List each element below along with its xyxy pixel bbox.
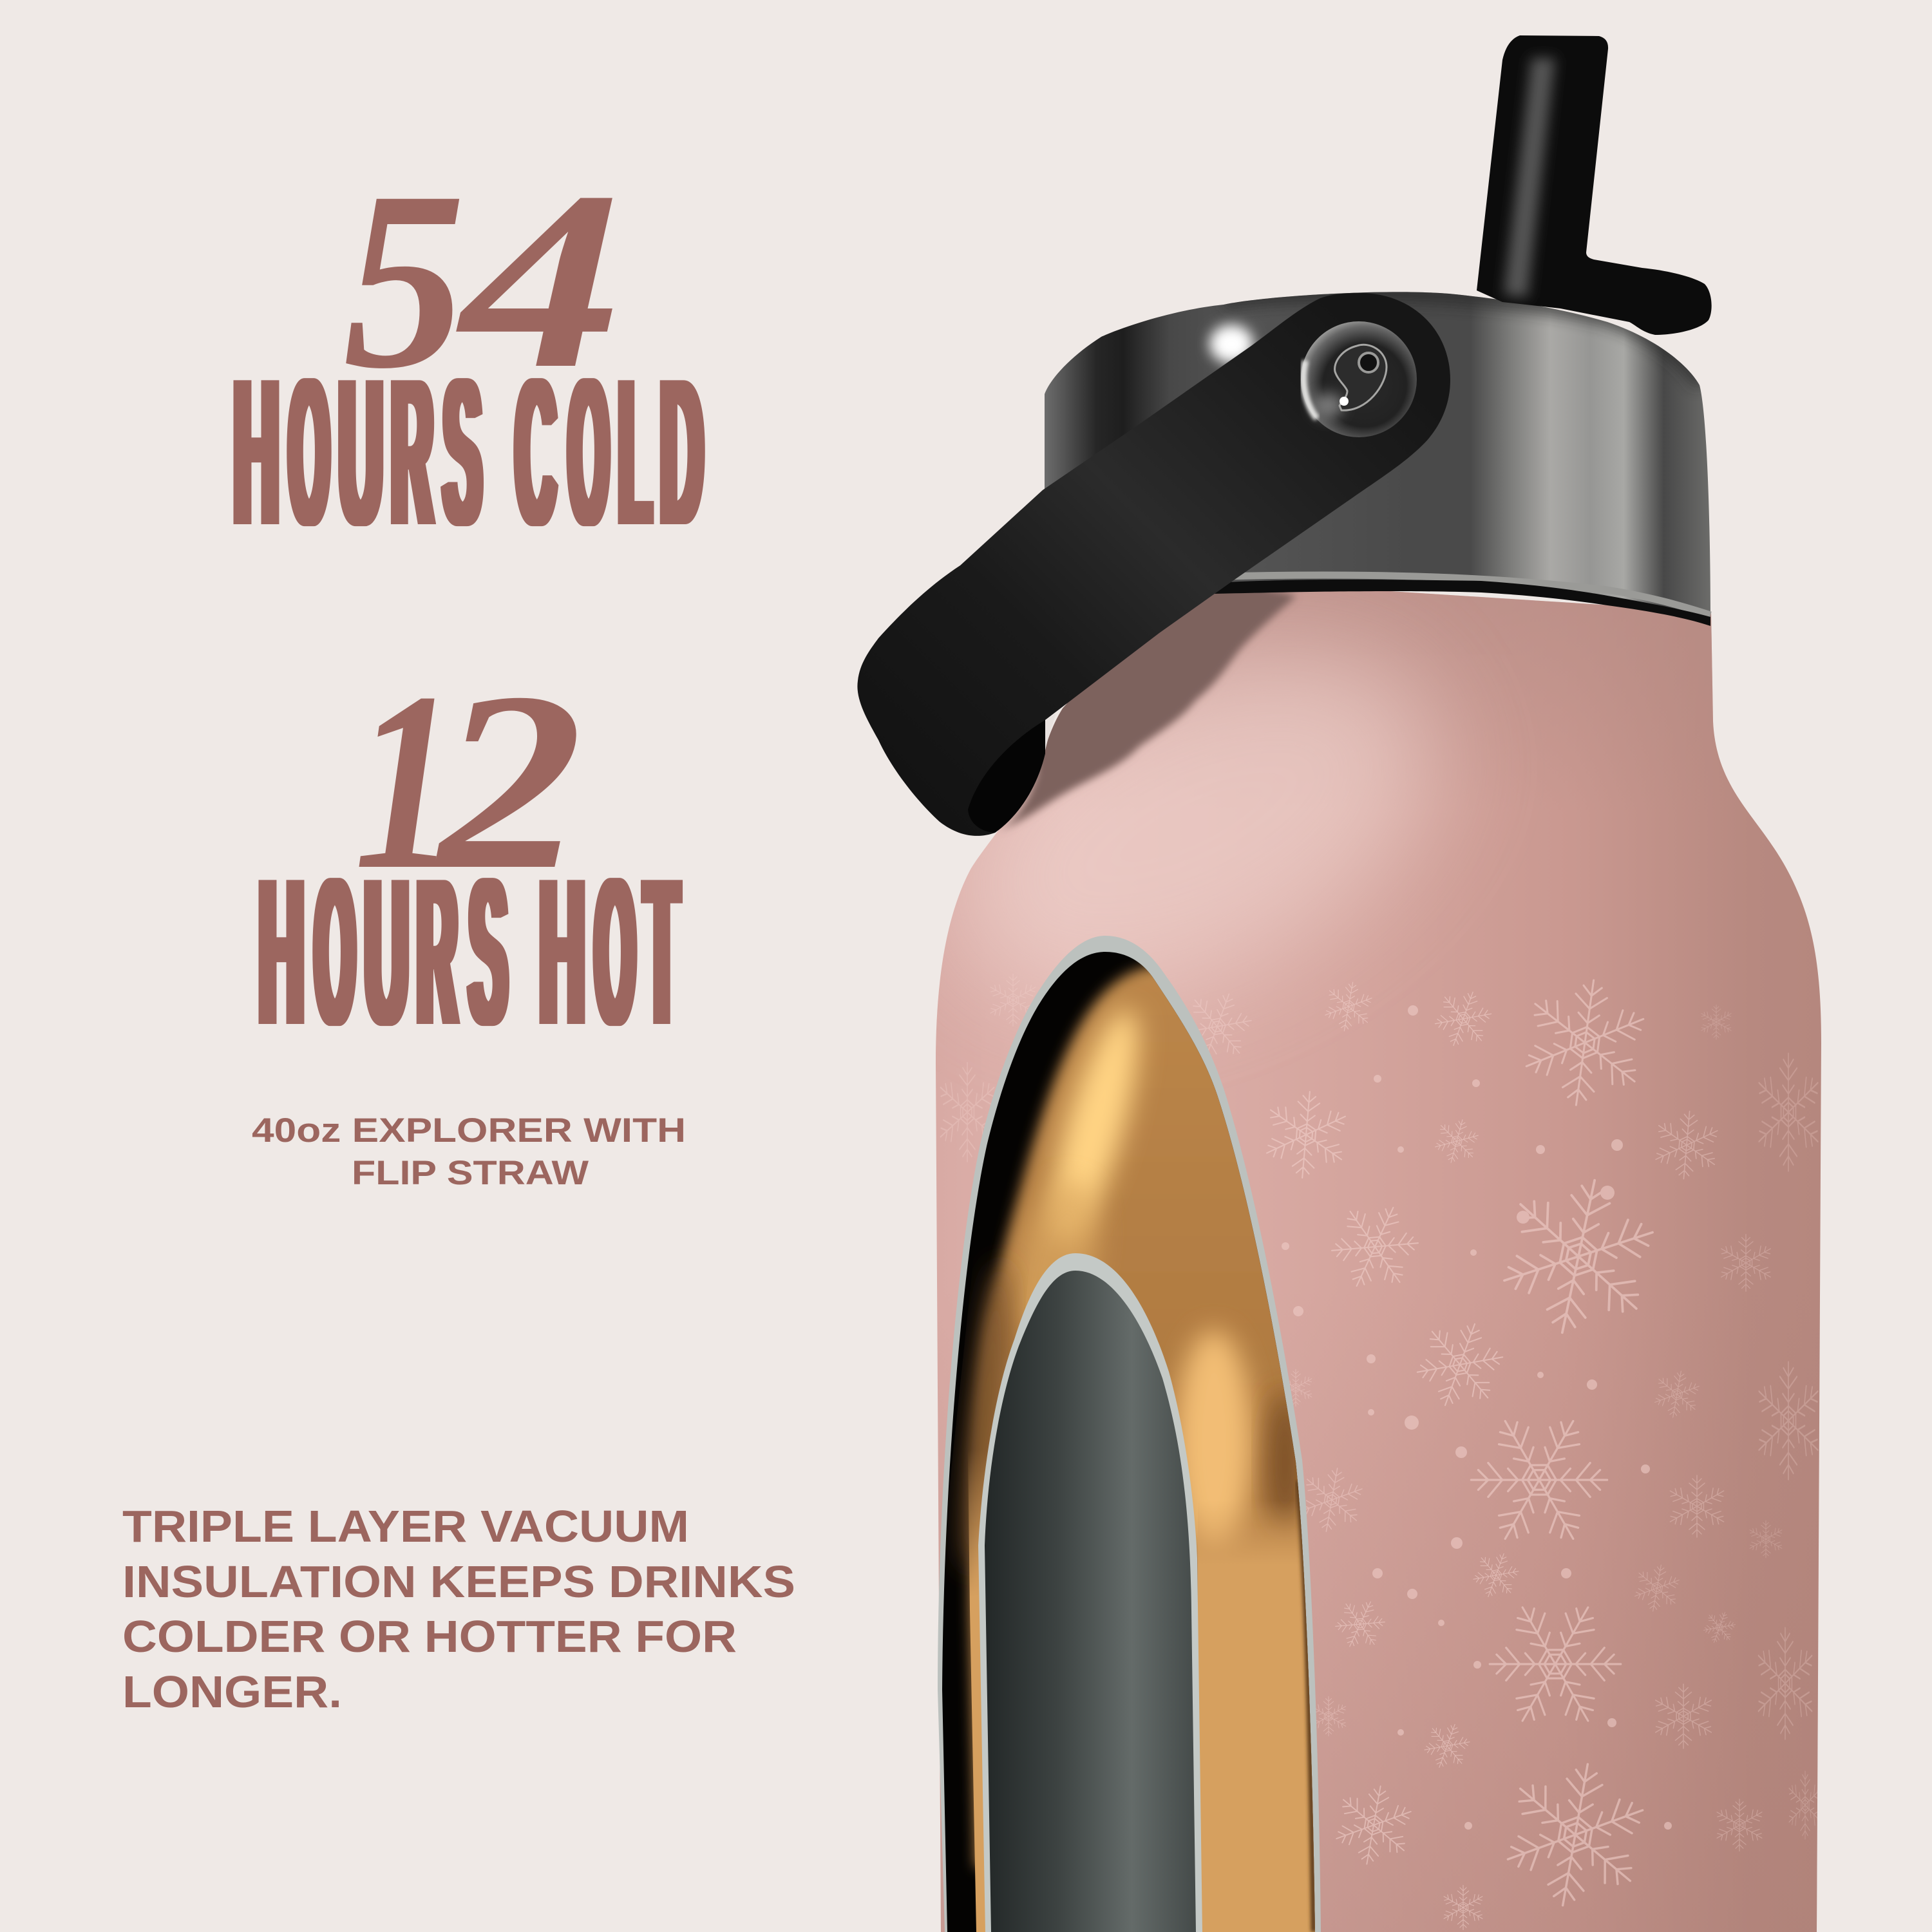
description text: COLDER OR HOTTER FOR [122, 1611, 737, 1662]
outer wall rim [938, 936, 1321, 1932]
insulation cutaway window [934, 934, 1340, 1932]
description text: INSULATION KEEPS DRINKS [122, 1557, 795, 1607]
rivet with logo [1301, 321, 1417, 437]
product name: 40oz EXPLORER WITH [252, 1112, 686, 1150]
handle strap [857, 293, 1450, 836]
number: 54: 4 [456, 138, 622, 421]
text: D [661, 335, 703, 569]
inner dark chamber [985, 1271, 1196, 1932]
number: 12: 2 [433, 639, 583, 922]
stat: 12 hours hot [259, 639, 679, 1068]
inner wall rim [978, 1253, 1202, 1932]
heading: hours hot: O [315, 835, 355, 1068]
heading: hours cold: S [443, 335, 482, 569]
heading: hours hot: S [469, 835, 507, 1068]
background sliver behind handle [1045, 713, 1056, 750]
heading: hours cold: R [392, 335, 433, 569]
stat: 54 hours cold [234, 138, 703, 569]
heading: hours hot: U [365, 835, 408, 1068]
bottle body [895, 576, 1821, 1932]
snowflake pattern [936, 972, 1824, 1930]
heading: hours cold: L [619, 335, 651, 569]
collar gap [1214, 580, 1710, 626]
handle shadow on shoulder [995, 576, 1296, 833]
heading: hours cold: O [569, 335, 609, 569]
inside of handle loop [968, 720, 1045, 833]
heading: hours hot: H [540, 835, 585, 1068]
description text: LONGER. [122, 1667, 342, 1717]
description text: TRIPLE LAYER VACUUM [122, 1501, 689, 1551]
cap lip [1224, 575, 1710, 615]
number: 12: 1 [354, 639, 457, 922]
number: 54: 5 [343, 138, 466, 421]
heading: hours cold: U [339, 335, 383, 569]
steel cap [1045, 292, 1710, 626]
vacuum gap and copper layer [934, 934, 1340, 1932]
heading: hours cold: C [516, 335, 556, 569]
heading: hours hot: R [417, 835, 457, 1068]
flip straw [1477, 35, 1712, 335]
heading: hours hot: H [259, 835, 304, 1068]
heading: hours cold: H [234, 335, 279, 569]
heading: hours cold: O [289, 335, 329, 569]
bottle illustration [857, 35, 1824, 1932]
heading: hours hot: O [595, 835, 635, 1068]
text: T [645, 835, 679, 1068]
product name: FLIP STRAW [352, 1154, 589, 1192]
